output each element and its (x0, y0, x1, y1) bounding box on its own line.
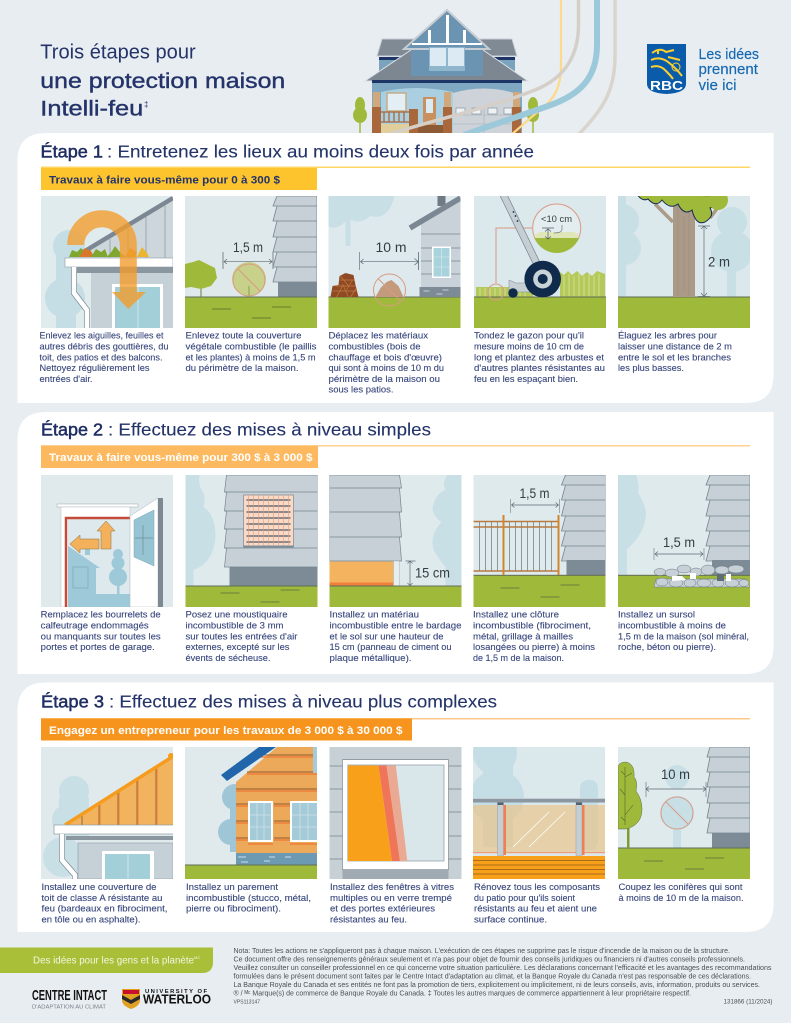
logo: RBC: vie ici (698, 78, 736, 94)
caption: conifères: Coupez les conifères qui sont (618, 881, 743, 892)
heading: Étape 3: Étape 3 (41, 692, 104, 712)
text block: legal note: Ce document offre des renseignements généraux seulement et n'a pas pour objet de fournir des conseils juridiques ou financiers ni d'autres conseils professionnels. (234, 956, 745, 964)
caption: gouttières: autres débris des gouttières, du (40, 340, 168, 352)
caption: élagage: entre le sol et les branches (618, 351, 731, 362)
caption: toit: toit de classe A résistante au (42, 892, 162, 903)
illustration: rock ground cover 1.5 m: 1,5 m (663, 535, 695, 550)
caption: gouttières: Nettoyez régulièrement les (40, 362, 150, 373)
banner: Des idées pour les gens et la planète (0, 948, 213, 973)
illustration: class A roof (41, 747, 174, 879)
illustration: house with flowing lines (353, 0, 615, 135)
caption: toit: en tôle ou en asphalte). (42, 913, 140, 924)
caption: couverture végétale: du périmètre de la maison. (186, 362, 298, 373)
illustration: non-combustible base 15 cm: 15 cm (415, 566, 450, 581)
illustration: vent screen (186, 475, 318, 607)
title: une protection maison (40, 70, 285, 93)
panel: Étape 2 (18, 412, 774, 674)
caption: patio: du patio pour qu'ils soient (474, 892, 575, 903)
heading: Étape 2: : Effectuez des mises à niveau simples (108, 420, 431, 440)
illustration: fence 1.5 m: 1,5 m (520, 486, 550, 501)
illustration: non-combustible base 15 cm (330, 475, 462, 607)
illustration: fence 1.5 m (474, 475, 606, 607)
caption: élagage: laisser une distance de 2 m (618, 340, 732, 352)
illustration: conifers 10 m: 10 m (661, 767, 690, 782)
caption: élagage: Élaguez les arbres pour (618, 330, 717, 341)
caption: bourrelets: Remplacez les bourrelets de (41, 609, 161, 620)
caption: sursol: Installez un sursol (618, 609, 695, 620)
caption: sursol: roche, béton ou pierre). (618, 641, 716, 652)
title: ‡ (144, 100, 148, 109)
caption: matériau incombustible: incombustible entre le bardage (330, 620, 462, 630)
caption: élagage: les plus basses. (618, 362, 684, 373)
panel: Étape 3 (18, 682, 774, 932)
text block: legal note: VPS113147 (234, 1000, 260, 1006)
caption: parement: Installez un parement (186, 881, 278, 892)
illustration: lawn mower: <10 cm (541, 214, 572, 225)
banner: Des idées pour les gens et la planète: Des idées pour les gens et la planète (33, 954, 194, 966)
logo: University of Waterloo: WATERLOO (143, 992, 211, 1006)
caption: moustiquaire: sur toutes les entrées d'air (186, 630, 298, 641)
illustration: multi-pane window (330, 747, 462, 879)
logo: Centre Intact: CENTRE INTACT (32, 987, 107, 1004)
caption: moustiquaire: évents de sécheuse. (186, 652, 270, 663)
logo: Centre Intact: D'ADAPTATION AU CLIMAT (32, 1004, 107, 1010)
heading: Étape 3: : Effectuez des mises à niveau plus complexes (109, 692, 497, 712)
illustration: non-combustible siding (185, 747, 317, 879)
logo: RBC: Les idées (698, 47, 759, 63)
caption: gazon: d'autres plantes résistantes au (474, 362, 605, 373)
caption: gazon: Tondez le gazon pour qu'il (474, 330, 584, 341)
caption: fenêtres: et des portes extérieures (330, 903, 435, 914)
caption: gazon: mesure moins de 10 cm de (474, 340, 584, 352)
caption: moustiquaire: externes, excepté sur les (186, 641, 290, 652)
caption: clôture: incombustible (fibrociment, (473, 620, 591, 630)
caption: matériaux combustibles: combustibles (bois de (328, 340, 420, 352)
logo: University of Waterloo: UNIVERSITY OF (145, 989, 207, 995)
cost band: 3 000 $ à 30 000 $ (41, 718, 750, 740)
caption: matériau incombustible: et le sol sur une hauteur de (330, 630, 444, 641)
logo: RBC: prennent (698, 62, 758, 78)
illustration: firewood 10 m: 10 m (376, 240, 406, 255)
caption: toit: Installez une couverture de (42, 881, 156, 892)
caption: clôture: Installez une clôture (473, 609, 559, 620)
logo: Centre Intact (32, 987, 107, 1010)
caption: matériau incombustible: 15 cm (panneau de ciment ou (330, 641, 452, 652)
illustration: pruned tree 2 m (618, 196, 750, 328)
illustration: lawn mower (474, 194, 606, 328)
caption: fenêtres: multiples ou en verre trempé (330, 892, 452, 903)
cost band: 3 000 $ à 30 000 $: Engagez un entrepreneur pour les travaux de 3 000 $ à 30 000 $ (49, 725, 402, 737)
caption: clôture: de 1,5 m de la maison. (473, 652, 564, 663)
title: Trois étapes pour (40, 42, 196, 64)
cost band: 0 à 300 $ (41, 166, 750, 190)
caption: bourrelets: ou manquants sur toutes les (41, 630, 161, 641)
illustration: conifers 10 m (618, 747, 750, 879)
text block: legal note: Nota: Toutes les actions ne s'appliqueront pas à chaque maison. L'exécution de ces étapes ne supprime pas le risque d'incendie de la maison ou de la structure. (234, 948, 730, 955)
cost band: 0 à 300 $: Travaux à faire vous-même pour 0 à 300 $ (49, 174, 280, 186)
caption: patio: Rénovez tous les composants (474, 881, 600, 892)
caption: matériaux combustibles: chauffage et bois d'œuvre) (328, 351, 442, 362)
caption: parement: incombustible (stucco, métal, (186, 892, 311, 903)
panel: Étape 1 (18, 133, 774, 403)
illustration: vegetation 1.5 m: 1,5 m (233, 240, 263, 255)
caption: patio: surface continue. (474, 913, 547, 924)
illustration: vegetation 1.5 m (185, 196, 317, 328)
text block: legal note: Veuillez consulter un conseiller professionnel en ce qui concerne votre situation particulière. Les déclarations concernant l'efficacité et les avantages des recommandations (234, 965, 772, 972)
caption: moustiquaire: incombustible de 3 mm (186, 620, 284, 630)
caption: matériau incombustible: Installez un matériau (330, 609, 419, 620)
logo: RBC: RBC (650, 79, 683, 93)
caption: bourrelets: portes et portes de garage. (41, 641, 155, 652)
caption: gazon: feu en les espaçant bien. (474, 373, 578, 384)
caption: patio: résistants au feu et aient une (474, 903, 597, 914)
caption: matériaux combustibles: périmètre de la maison ou (328, 373, 440, 384)
caption: matériaux combustibles: qui sont à moins de 10 m du (328, 362, 444, 373)
caption: gouttières: toit, des patios et des balcons. (40, 351, 162, 362)
cost band: 300 $ à 3 000 $: Travaux à faire vous-même pour 300 $ à 3 000 $ (49, 452, 312, 464)
logo: University of Waterloo (122, 989, 211, 1009)
text block: legal note: formulées dans le présent document sont faites par le Centre Intact d'adaptation au climat, et la Banque Royale du Canada n'est pas responsable de ces déclarations. (234, 974, 751, 980)
title (40, 42, 285, 121)
cost band: 300 $ à 3 000 $ (41, 445, 750, 468)
logo: RBC (647, 44, 759, 94)
heading: Étape 2: Étape 2 (41, 420, 103, 440)
caption: conifères: à moins de 10 m de la maison. (618, 892, 744, 903)
illustration: firewood 10 m (328, 196, 460, 328)
caption: sursol: 1,5 m de la maison (sol minéral, (618, 630, 749, 641)
caption: gouttières: Enlevez les aiguilles, feuilles et (40, 330, 164, 341)
caption: couverture végétale: Enlevez toute la couverture (186, 330, 302, 341)
caption: matériau incombustible: plaque métallique). (330, 652, 412, 663)
caption: bourrelets: calfeutrage endommagés (41, 620, 149, 630)
caption: clôture: métal, grillage à mailles (473, 630, 573, 641)
caption: gouttières: entrées d'air. (40, 373, 92, 384)
illustration: pruned tree 2 m: 2 m (708, 254, 730, 270)
caption: gazon: long et plantez des arbustes et (474, 351, 604, 362)
caption: toit: feu (bardeaux en fibrociment, (42, 903, 168, 914)
text block: legal note: La Banque Royale du Canada et ses entités ne font pas la promotion de tiers, explicitement ou implicitement, ni de leurs conseils, avis, information, produits ou services. (234, 982, 760, 989)
text block: legal note: 131866 (11/2024) (724, 998, 772, 1006)
illustration: door weatherstripping (41, 475, 173, 607)
title: Intelli-feu (40, 98, 143, 121)
caption: matériaux combustibles: sous les patios. (328, 384, 394, 395)
caption: fenêtres: résistantes au feu. (330, 913, 407, 924)
caption: parement: pierre ou fibrociment). (186, 903, 281, 914)
illustration: gutter cleaning (41, 196, 173, 328)
text block: legal note (234, 948, 772, 1006)
illustration: patio railing (473, 747, 605, 879)
caption: clôture: losangées ou pierre) à moins (473, 641, 595, 652)
illustration: rock ground cover 1.5 m (618, 475, 750, 607)
caption: moustiquaire: Posez une moustiquaire (186, 609, 288, 620)
caption: sursol: incombustible à moins de (618, 620, 726, 630)
heading: Étape 1: Étape 1 (40, 142, 103, 162)
caption: couverture végétale: et les plantes) à moins de 1,5 m (186, 351, 316, 362)
text block: legal note: ® / ᴹᶜ Marque(s) de commerce de Banque Royale du Canada. ‡ Toutes les autres marques de commerce appartiennent à leur propriétaire respectif. (234, 990, 691, 998)
caption: matériaux combustibles: Déplacez les matériaux (328, 330, 428, 341)
heading: Étape 1: : Entretenez les lieux au moins deux fois par année (107, 142, 534, 162)
caption: fenêtres: Installez des fenêtres à vitres (330, 881, 454, 892)
caption: couverture végétale: végétale combustible (le paillis (186, 340, 317, 352)
banner: Des idées pour les gens et la planète: MC (194, 955, 200, 960)
